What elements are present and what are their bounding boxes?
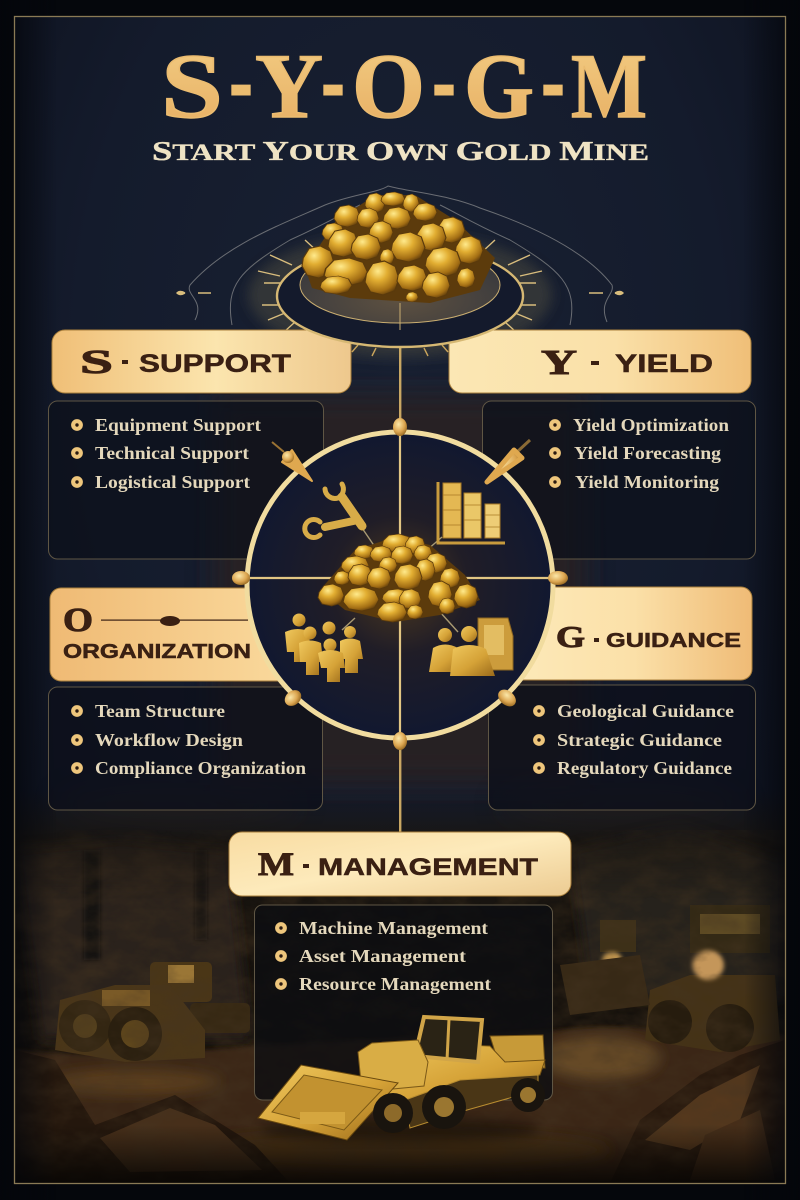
organization items: Team Structure — [95, 701, 225, 721]
heading: Y - Yield — [449, 330, 751, 393]
mine scene background — [15, 825, 785, 1183]
diagonal pins — [272, 440, 530, 710]
heading: O - Organization — [50, 588, 310, 681]
gold plate — [277, 245, 523, 356]
title: - — [542, 30, 564, 132]
yield items: Yield Monitoring — [575, 472, 719, 492]
chassis — [405, 1075, 538, 1128]
heading: G - Guidance — [490, 587, 752, 680]
title: - — [433, 30, 455, 132]
heading: S - Support — [52, 330, 351, 393]
yield items: Yield Forecasting — [574, 443, 721, 463]
support items: Logistical Support — [95, 472, 250, 492]
icon: advisor and board — [429, 618, 513, 676]
background machine: right — [560, 905, 780, 1052]
management items — [277, 918, 491, 994]
connector hairlines — [342, 525, 458, 632]
title: M — [571, 35, 647, 137]
heading: M - Management: M — [258, 847, 294, 883]
heading: G - Guidance: G — [556, 619, 585, 654]
dirt ground — [15, 1027, 785, 1183]
icon: centre gold pile — [318, 534, 480, 622]
central circle diagram — [232, 418, 568, 750]
panel: management list — [254, 905, 552, 1100]
heading: O - Organization: ORGANIZATION — [63, 641, 251, 663]
vertical connector line — [399, 345, 401, 835]
heading: S - Support: SUPPORT — [139, 350, 291, 378]
yield items: Yield Optimization — [573, 415, 729, 435]
icon: gold loader — [258, 1017, 545, 1142]
connector beads — [232, 418, 568, 750]
heading: M - Management — [229, 832, 571, 896]
title: Y — [255, 35, 323, 137]
bucket — [258, 1065, 398, 1140]
title: O — [352, 35, 425, 137]
heading: S - Support: S — [80, 344, 113, 381]
icon: bar chart — [438, 482, 505, 543]
title: G — [464, 35, 534, 137]
icon: top gold nugget pile — [302, 192, 495, 303]
yield items — [551, 415, 729, 492]
cab — [415, 1017, 482, 1062]
heading: M - Management: MANAGEMENT — [318, 854, 538, 881]
guidance items: Regulatory Guidance — [557, 758, 732, 778]
organization items: Workflow Design — [95, 730, 243, 750]
heading: O - Organization: O — [63, 602, 93, 639]
cave walls — [27, 848, 772, 1042]
heading: Y - Yield: Y — [541, 343, 577, 382]
cross lines — [247, 432, 553, 738]
subtitle: START Y OUR O WN G OLD M INE — [152, 136, 649, 166]
title — [161, 30, 647, 137]
icon: wrenches — [305, 484, 362, 538]
support items: Technical Support — [95, 443, 249, 463]
heading: G - Guidance: GUIDANCE — [606, 630, 741, 652]
gauge halo outline — [189, 186, 612, 357]
support items: Equipment Support — [95, 415, 261, 435]
title: - — [230, 30, 252, 132]
icon: team group — [285, 614, 363, 682]
background machine: left — [55, 962, 250, 1062]
panel: support list — [48, 401, 324, 559]
guidance items: Geological Guidance — [557, 701, 734, 721]
organization items: Compliance Organization — [95, 758, 306, 778]
organization items — [73, 701, 306, 778]
panel: yield list — [482, 401, 756, 559]
support items — [73, 415, 261, 492]
hood — [358, 1040, 428, 1092]
rocks — [18, 1042, 780, 1169]
panel: organization list — [48, 687, 322, 810]
gauge ticks — [177, 240, 623, 332]
title: - — [322, 30, 344, 132]
management items: Machine Management — [299, 918, 488, 938]
title: S — [161, 35, 223, 137]
guidance items: Strategic Guidance — [557, 730, 722, 750]
management items: Resource Management — [299, 974, 491, 994]
panel: guidance list — [488, 685, 756, 810]
heading: Y - Yield: YIELD — [615, 350, 713, 378]
management items: Asset Management — [299, 946, 466, 966]
wheels — [373, 1078, 545, 1133]
guidance items — [535, 701, 734, 778]
rear body — [490, 1035, 545, 1068]
